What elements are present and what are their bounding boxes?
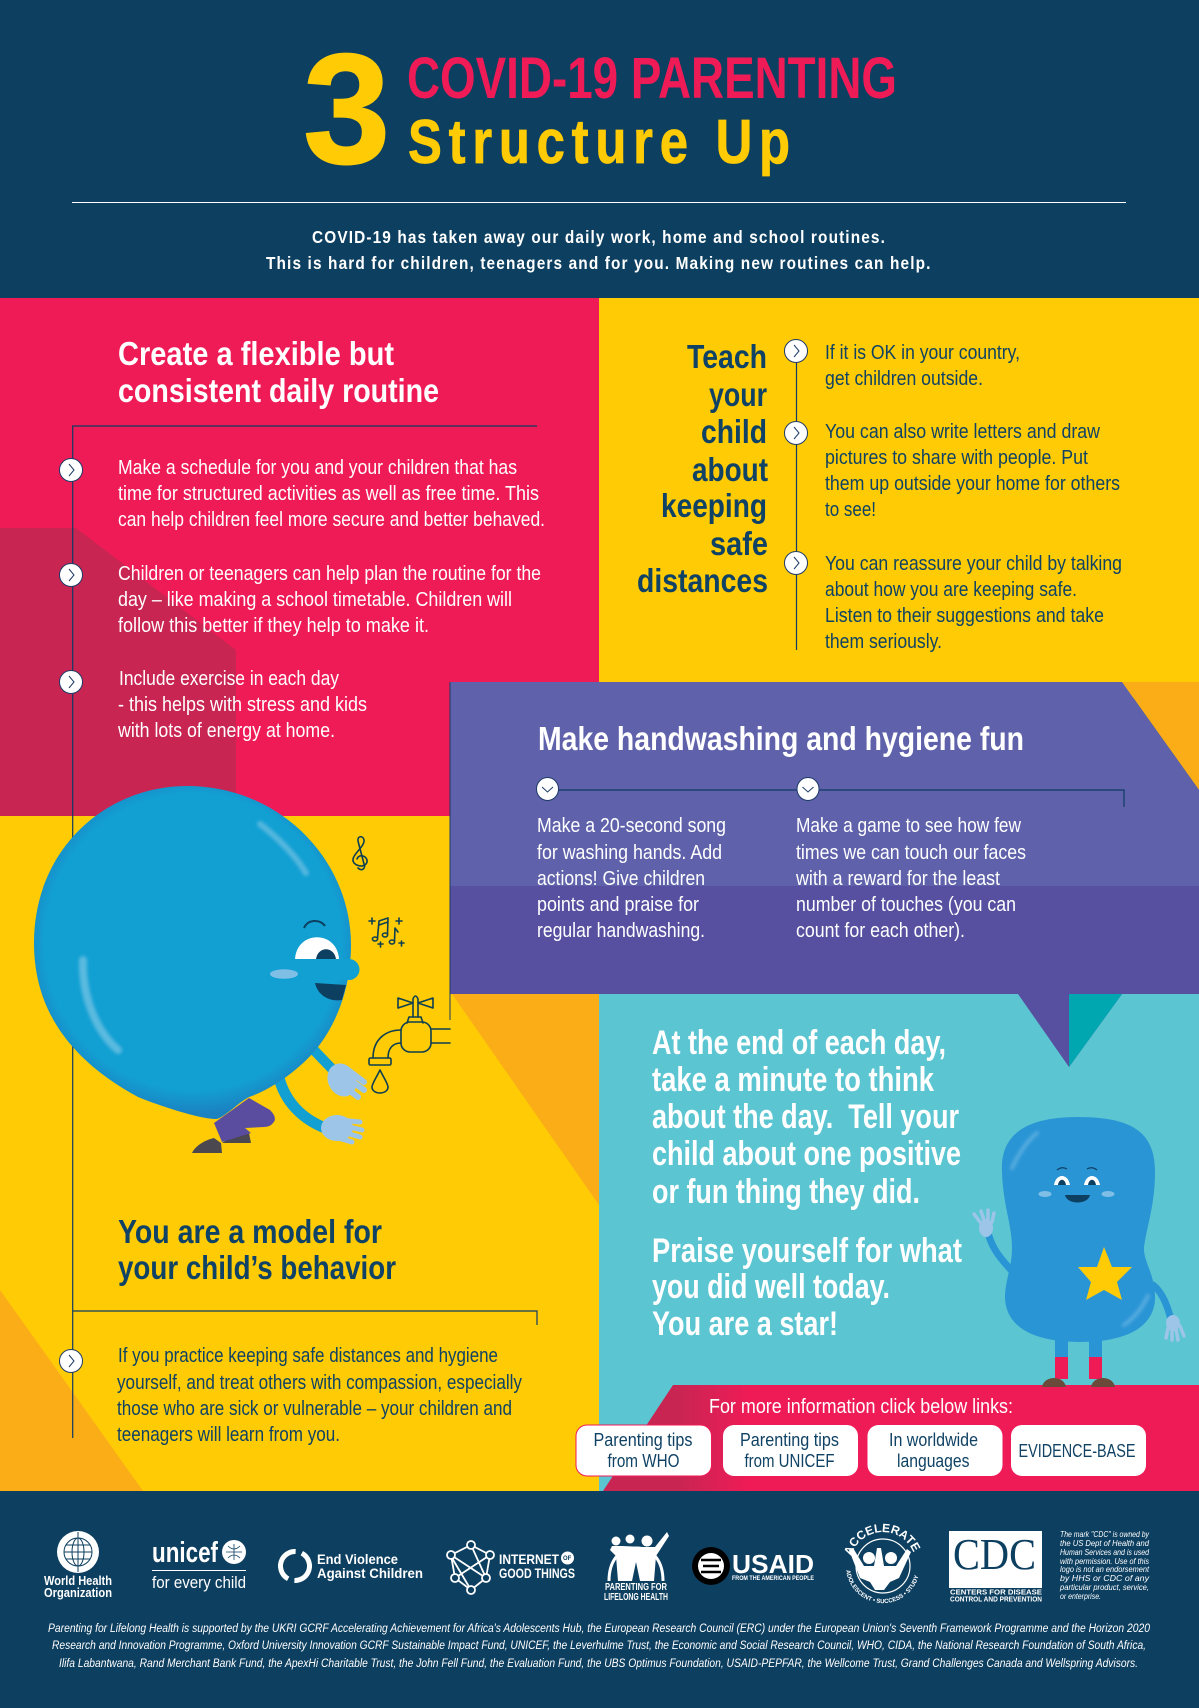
handwashing text 2: with a reward for the least: [795, 868, 1000, 890]
safe distance text 2: them up outside your home for others: [825, 473, 1120, 495]
button: evidence base: [1011, 1425, 1146, 1476]
right bullet node 1: [784, 340, 808, 362]
reflection text: child about one positive: [652, 1135, 961, 1173]
CDC disclaimer note: particular product, service,: [1059, 1583, 1149, 1592]
handwashing text 1: for washing hands. Add: [537, 842, 722, 864]
button: worldwide languages: [868, 1425, 1002, 1476]
logo: Accelerate: ACCELERATE: [844, 1524, 920, 1556]
timeline: left vertical line: [73, 426, 537, 1438]
links label: For more information click below links:: [709, 1396, 1013, 1418]
reflection text: take a minute to think: [652, 1061, 934, 1099]
handwashing text 1: Make a 20-second song: [537, 815, 726, 837]
routine text 1: can help children feel more secure and better behaved.: [118, 509, 545, 531]
heading: teach safe distances: safe: [710, 525, 768, 562]
handwashing text 1: actions! Give children: [537, 868, 705, 890]
reflection text: or fun thing they did.: [652, 1173, 920, 1211]
title line: COVID-19 Parenting: COVID-19 PARENTING: [407, 46, 897, 111]
logo: CDC: CENTERS FOR DISEASE: [950, 1590, 1042, 1596]
timeline: right column line: [796, 351, 798, 650]
logo: End Violence Against Children: End Violence: [317, 1551, 398, 1567]
routine text 2: day – like making a school timetable. Children will: [118, 589, 512, 611]
safe distance text 2: You can also write letters and draw: [825, 421, 1100, 443]
routine text 2: [118, 563, 541, 637]
character arms: [279, 1046, 335, 1128]
right bullet node 3: [784, 552, 808, 574]
star character hands: [974, 1210, 1184, 1340]
logo: UNICEF: for every child: [152, 1573, 246, 1592]
safe distance text 2: pictures to share with people. Put: [825, 447, 1088, 469]
routine text 2: Children or teenagers can help plan the routine for the: [118, 563, 541, 585]
model text: teenagers will learn from you.: [117, 1424, 340, 1446]
button: evidence base: EVIDENCE-BASE: [1018, 1440, 1136, 1461]
routine text 3: Include exercise in each day: [119, 668, 339, 690]
logo: World Health Organization: World Health: [44, 1573, 112, 1588]
logo: End Violence Against Children: [275, 1546, 423, 1586]
heading: model behaviour: your child’s behavior: [118, 1249, 396, 1286]
button: worldwide languages: languages: [897, 1450, 970, 1471]
handwashing node 2: [797, 778, 819, 800]
logo: Parenting for Lifelong Health: [604, 1532, 669, 1603]
logo: CDC: [949, 1530, 1042, 1604]
title line: Structure Up: Structure Up: [408, 108, 790, 177]
handwashing text 1: [537, 815, 726, 942]
reflection text: about the day. Tell your: [652, 1098, 959, 1136]
CDC disclaimer note: by HHS or CDC of any: [1060, 1574, 1150, 1583]
logo: Internet of Good Things: [447, 1541, 575, 1594]
handwashing text 1: points and praise for: [537, 894, 699, 916]
safe distance text 2: to see!: [825, 499, 876, 521]
heading: teach safe distances: about: [692, 451, 768, 488]
intro text: [266, 228, 930, 273]
routine text 3: with lots of energy at home.: [117, 720, 335, 742]
logo: Internet of Good Things: GOOD THINGS: [499, 1565, 575, 1581]
logo: Internet of Good Things: OF: [563, 1556, 572, 1562]
handwashing node 1: [536, 778, 558, 800]
logo: Parenting for Lifelong Health: LIFELONG HEALTH: [604, 1591, 668, 1603]
icon: water tap: [369, 996, 450, 1093]
panel: yellow model background: [0, 816, 599, 1491]
star character highlights: [1012, 1133, 1148, 1325]
panel: pink routine background: [0, 298, 599, 816]
star character mouth: [1065, 1195, 1090, 1202]
routine text 2: follow this better if they help to make it.: [118, 615, 429, 637]
logo: UNICEF: unicef: [152, 1537, 218, 1569]
panel: yellow safe distance background: [599, 298, 1199, 698]
title number 3: 3: [303, 22, 390, 197]
button: WHO: [576, 1425, 712, 1476]
icon: treble clef: [353, 837, 367, 870]
logo: World Health Organization: [44, 1531, 112, 1600]
heading: teach safe distances: Teach: [687, 338, 767, 375]
handwashing text 2: Make a game to see how few: [796, 815, 1021, 837]
logo: USAID: [692, 1547, 814, 1585]
heading: teach safe distances: your: [709, 376, 767, 413]
character legs and shoes: [192, 1098, 275, 1153]
funding statement: [48, 1623, 1151, 1670]
button: UNICEF: [723, 1425, 858, 1476]
handwashing text 2: number of touches (you can: [796, 894, 1016, 916]
star icon: [1078, 1247, 1132, 1300]
handwashing text 2: count for each other).: [796, 920, 965, 942]
bullet node 1: [60, 458, 82, 482]
nose: [295, 959, 360, 980]
icon: music notes: [369, 918, 404, 947]
CDC disclaimer note: [1059, 1530, 1150, 1601]
routine text 3: [117, 668, 367, 742]
handwashing text 2: times we can touch our faces: [796, 842, 1026, 864]
heading: handwashing: Make handwashing and hygiene fun: [538, 720, 1024, 757]
heading: model behaviour: You are a model for: [118, 1213, 382, 1250]
safe distance text 3: [825, 553, 1122, 653]
safe distance text 3: Listen to their suggestions and take: [825, 605, 1104, 627]
logo: Accelerate: ADOLESCENT • SUCCESS • STUDY: [846, 1570, 918, 1604]
model text: those who are sick or vulnerable – your children and: [117, 1398, 512, 1420]
model text: yourself, and treat others with compassion, especially: [117, 1372, 522, 1394]
logo: Internet of Good Things: INTERNET: [499, 1551, 559, 1567]
model text: [117, 1345, 522, 1446]
heading: teach safe distances: [637, 338, 768, 599]
intro text: This is hard for children, teenagers and for you. Making new routines can help.: [266, 254, 930, 273]
star character eyes: [1054, 1168, 1100, 1185]
logo: CDC: CDC: [953, 1530, 1036, 1579]
model bullet node: [60, 1350, 82, 1372]
logo: UNICEF: [152, 1537, 246, 1592]
panel: teal reflection background: [599, 994, 1199, 1491]
heading: daily routine: consistent daily routine: [118, 372, 439, 409]
reflection text: You are a star!: [652, 1305, 838, 1343]
illustration: balloon character washing hands: [34, 786, 364, 1153]
heading: teach safe distances: child: [701, 413, 767, 450]
heading: teach safe distances: keeping: [661, 487, 767, 524]
panel: header background: [0, 0, 1199, 298]
CDC disclaimer note: Human Services and is used: [1060, 1548, 1149, 1557]
star character legs: [1042, 1335, 1115, 1387]
safe distance text 2: [825, 421, 1120, 521]
logo: Accelerate: [844, 1524, 920, 1604]
logo: Parenting for Lifelong Health: PARENTING FOR: [605, 1581, 667, 1593]
routine text 1: Make a schedule for you and your children that has: [118, 457, 517, 479]
safe distance text 1: [825, 342, 1020, 390]
bullet node 3: [60, 670, 82, 694]
routine text 3: - this helps with stress and kids: [118, 694, 367, 716]
logo: World Health Organization: Organization: [44, 1585, 112, 1600]
CDC disclaimer note: logo is not an endorsement: [1060, 1565, 1150, 1574]
star character arms: [989, 1236, 1170, 1316]
mouth: [315, 983, 346, 1000]
orange corner accent: [1122, 682, 1199, 790]
star character cheeks: [1038, 1191, 1114, 1197]
safe distance text 3: You can reassure your child by talking: [825, 553, 1122, 575]
reflection text: you did well today.: [652, 1268, 890, 1306]
heading: teach safe distances: distances: [637, 562, 768, 599]
reflection text: At the end of each day,: [652, 1024, 946, 1062]
heading: daily routine: [118, 335, 439, 409]
panel: links strip: [603, 1385, 1199, 1491]
handwashing text 2: [795, 815, 1026, 942]
body highlights: [83, 824, 306, 1050]
routine text 1: [118, 457, 545, 531]
button: WHO: Parenting tips: [594, 1429, 692, 1450]
illustration: star character waving: [974, 1117, 1184, 1387]
heading: daily routine: Create a flexible but: [118, 335, 394, 372]
panel: footer background: [0, 1491, 1199, 1708]
button: worldwide languages: In worldwide: [889, 1429, 978, 1450]
intro text: COVID-19 has taken away our daily work, home and school routines.: [312, 228, 885, 247]
CDC disclaimer note: The mark "CDC" is owned by: [1060, 1530, 1150, 1539]
eye: [295, 921, 339, 959]
logo: End Violence Against Children: Against Children: [317, 1565, 423, 1581]
button: UNICEF: from UNICEF: [744, 1450, 834, 1471]
reflection text: Praise yourself for what: [652, 1232, 962, 1270]
reflection text: [652, 1024, 962, 1343]
logo: USAID: USAID: [732, 1549, 814, 1579]
handwashing timeline: [547, 790, 1124, 807]
CDC disclaimer note: with permission. Use of this: [1060, 1557, 1149, 1566]
character hands: [321, 1059, 364, 1142]
safe distance text 3: them seriously.: [825, 631, 942, 653]
heading: model behaviour: [118, 1213, 396, 1286]
button: UNICEF: Parenting tips: [740, 1429, 839, 1450]
logo: USAID: FROM THE AMERICAN PEOPLE: [732, 1576, 814, 1582]
routine text 1: time for structured activities as well as free time. This: [118, 483, 539, 505]
safe distance text 1: If it is OK in your country,: [825, 342, 1020, 364]
model text: If you practice keeping safe distances and hygiene: [118, 1345, 498, 1367]
logo: CDC: CONTROL AND PREVENTION: [950, 1596, 1042, 1604]
star character body: [1002, 1117, 1155, 1342]
safe distance text 1: get children outside.: [825, 368, 983, 390]
character body: [34, 786, 351, 1119]
cheek: [270, 969, 298, 979]
title block: [303, 22, 897, 197]
handwashing text 1: regular handwashing.: [537, 920, 705, 942]
button: WHO: from WHO: [608, 1450, 680, 1471]
panel: handwashing speech bubble: [450, 682, 1199, 1067]
bullet node 2: [60, 564, 82, 586]
CDC disclaimer note: the US Dept of Health and: [1060, 1539, 1150, 1548]
safe distance text 3: about how you are keeping safe.: [825, 579, 1077, 601]
right bullet node 2: [784, 422, 808, 444]
CDC disclaimer note: or enterprise.: [1060, 1592, 1101, 1601]
